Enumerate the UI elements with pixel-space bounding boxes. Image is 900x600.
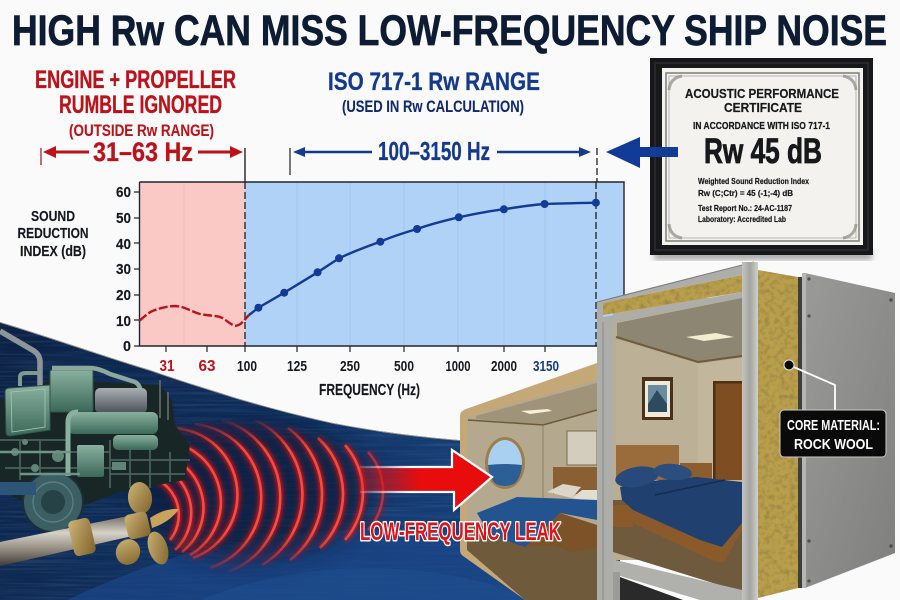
heading: ISO 717-1 Rw range: (USED IN Rw CALCULATION) [342,98,524,116]
icon: propeller and shaft [0,481,179,569]
heading: ignored low-frequency range [35,66,236,140]
y axis labels: 30 [116,262,131,278]
heading: ignored low-frequency range: ENGINE + PROPELLER [35,66,236,94]
certificate text [685,86,839,224]
certificate frame [650,58,873,255]
exhaust pipe [0,331,40,386]
door [715,382,742,480]
range marker: 100-3150 Hz: 100–3150 Hz [378,136,490,166]
y axis title: INDEX (dB) [20,244,86,260]
bed cover [620,477,742,547]
y axis labels: 40 [116,237,131,253]
y axis labels: 60 [116,185,131,201]
chart: sound reduction index by frequency [116,182,624,399]
floor [613,500,742,592]
floor [467,525,597,600]
back wall [616,340,698,470]
bed frame [523,513,597,552]
grey cylinder [95,388,147,413]
sound waves [135,420,383,572]
heading: ignored low-frequency range: (OUTSIDE Rw RANGE) [69,122,214,140]
curve: outside range (dashed) [140,306,249,326]
cabin ceiling [476,383,597,425]
x axis labels [160,358,559,375]
icon: ship engine [0,331,190,532]
ceiling light [521,409,552,414]
chart zone: Rw range [245,182,624,346]
callout: core material: ROCK WOOL [794,436,873,453]
y axis title: SOUND [31,209,75,225]
flywheel [23,472,83,532]
curve: Rw range [249,203,596,315]
floor beam [607,558,742,600]
ceiling light [686,333,734,341]
y axis labels: 10 [116,314,131,330]
certificate text: CERTIFICATE [724,100,802,115]
bed frame [633,510,742,562]
green housing [50,370,93,412]
right wall panel [567,431,597,465]
heading: ISO 717-1 Rw range [328,68,540,116]
pillows [547,484,581,498]
range marker: 31-63 Hz [41,137,245,182]
ceiling [617,298,742,363]
x axis labels: 63 [198,358,216,375]
headboard [616,445,679,480]
right cabin section [597,262,895,600]
arrow: certificate to Rw range [606,137,678,168]
certificate text: IN ACCORDANCE WITH ISO 717-1 [693,120,830,132]
cabin shell [460,363,597,600]
y axis title [18,209,88,260]
certificate text: Laboratory: Accredited Lab [698,214,786,224]
y axis labels: 20 [116,288,131,304]
top rock wool [603,275,742,315]
nightstand [680,463,712,479]
low-frequency leak label: LOW-FREQUENCY LEAK [360,518,561,546]
headboard [553,467,597,494]
sea background [0,320,620,600]
range marker: 100-3150 Hz [290,136,597,182]
certificate text: Weighted Sound Reduction Index [698,176,809,186]
propeller hub [124,511,152,540]
interior background [613,298,744,560]
lower machinery [0,440,190,488]
y axis labels: 50 [116,211,131,227]
x axis labels: 3150 [533,359,559,375]
x axis title: FREQUENCY (Hz) [319,382,420,399]
top frame [597,262,758,600]
certificate text: ACOUSTIC PERFORMANCE [685,86,839,101]
bed [477,497,597,547]
shaft [0,515,137,566]
callout box [780,410,886,457]
x axis labels: 100 [237,359,257,375]
side table [613,505,633,527]
certificate paper [662,68,863,245]
left cabin cutaway [460,363,597,600]
propeller blades [126,481,154,515]
corner post [742,262,758,600]
porthole window [485,437,525,489]
x axis labels: 250 [340,359,360,375]
shaft collar [67,517,97,557]
side rock wool [758,270,798,598]
pillows [614,463,660,491]
data points [254,199,600,312]
callout: core material [780,360,886,457]
leader dot [784,360,794,370]
leader line [789,365,835,412]
certificate text: Rw (C;Ctr) = 45 (-1;-4) dB [698,188,793,198]
heading: ISO 717-1 Rw range: ISO 717-1 Rw RANGE [328,68,540,96]
green cylinders [68,412,158,434]
certificate [650,58,873,260]
certificate text: Rw 45 dB [704,132,822,171]
y axis labels: 0 [123,339,131,355]
x axis labels: 125 [287,359,307,375]
heading: ignored low-frequency range: RUMBLE IGNORED [59,91,222,119]
cabin back walls [467,380,597,600]
side wall [698,358,742,490]
x axis labels: 500 [394,359,414,375]
picture [642,377,673,420]
y axis title: REDUCTION [18,226,88,242]
x axis labels: 1000 [446,359,470,375]
x axis labels: 31 [160,358,175,375]
range marker: 31-63 Hz: 31–63 Hz [93,137,193,167]
chart zone: outside Rw range [140,182,245,346]
outer grey panel [805,273,895,588]
engine dark backing [0,380,190,505]
x axis labels: 2000 [491,359,517,375]
y axis labels [116,185,131,355]
certificate text: Test Report No.: 24-AC-1187 [698,203,792,213]
low-frequency arrow [360,450,492,510]
